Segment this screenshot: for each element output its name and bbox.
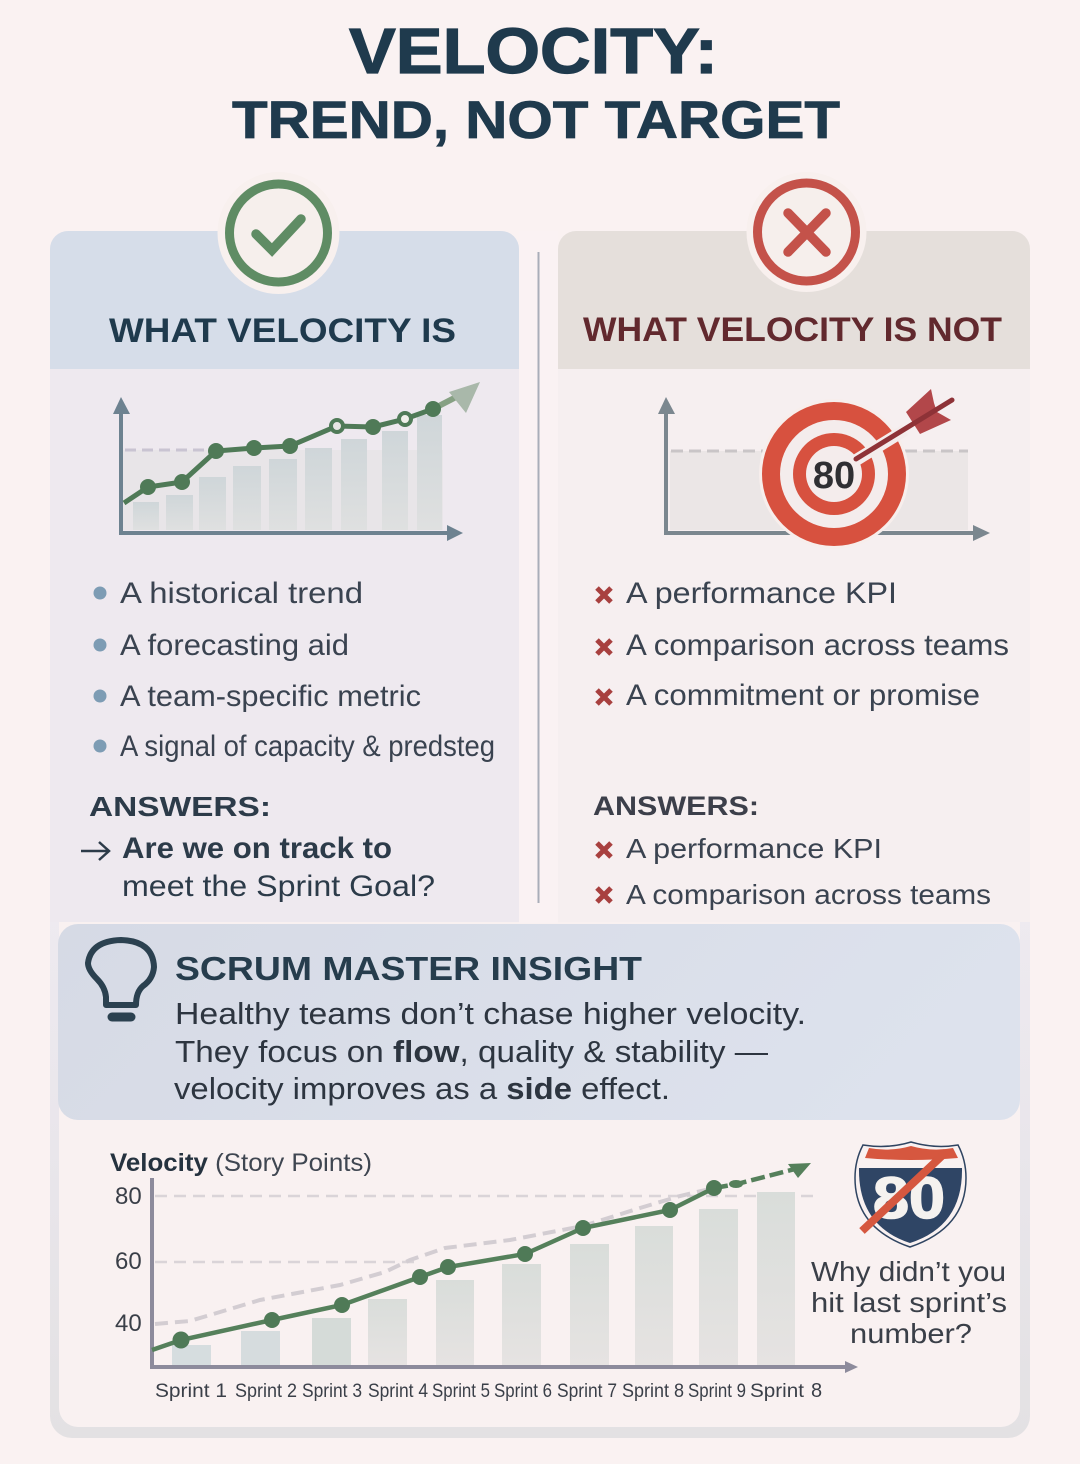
divider	[538, 252, 540, 903]
list: what velocity is: A historical trend	[120, 577, 363, 610]
x axis labels: 8	[811, 1380, 822, 1402]
list: what velocity is: A forecasting aid	[120, 629, 349, 662]
y axis labels: 60	[115, 1248, 142, 1275]
list: what velocity is not: A performance KPI	[626, 577, 897, 610]
dashed trend line	[155, 1188, 714, 1324]
panel: what velocity is not	[558, 172, 1030, 922]
heading: what velocity is: WHAT VELOCITY IS	[109, 312, 456, 350]
y axis labels	[115, 1183, 142, 1337]
answers: what velocity is: meet the Sprint Goal?	[122, 870, 435, 903]
answers: what velocity is: ANSWERS:	[89, 791, 271, 822]
x axis labels: Sprint 5	[432, 1381, 490, 1402]
chart: rising velocity trend	[113, 382, 480, 541]
list: what velocity is not	[597, 577, 1009, 712]
list: what velocity is not: A commitment or promise	[626, 679, 980, 712]
callout: question: hit last sprint’s	[811, 1287, 1007, 1318]
x axis labels: Sprint	[750, 1381, 805, 1402]
callout: question	[811, 1256, 1007, 1349]
answers: what velocity is	[81, 791, 435, 903]
y axis labels: 80	[115, 1183, 142, 1210]
insight text: velocity improves as a side effect.	[174, 1071, 670, 1106]
list: what velocity is: A signal of capacity & predsteg	[120, 730, 495, 763]
panel: velocity chart	[50, 900, 1030, 1438]
icon: lightbulb	[88, 940, 154, 1017]
answers: what velocity is: Are we on track to	[122, 832, 392, 865]
gridlines	[155, 1196, 815, 1262]
x axis labels: Sprint 8	[622, 1381, 684, 1402]
chart: target on velocity	[658, 389, 990, 549]
x axis labels: Sprint 6	[494, 1381, 552, 1402]
chart heading: Velocity (Story Points)	[110, 1149, 372, 1177]
icon: check mark	[218, 172, 340, 294]
panel: what velocity is	[50, 172, 519, 922]
y axis labels: 40	[115, 1310, 142, 1337]
icon: crossed-out highway shield	[855, 1142, 966, 1247]
icon: crossed-out highway shield: 80	[873, 1166, 945, 1231]
list: what velocity is	[94, 577, 495, 763]
title	[232, 15, 840, 150]
insight text	[174, 996, 806, 1106]
x axis labels: Sprint 3	[302, 1381, 362, 1402]
icon: cross mark	[746, 172, 866, 292]
title: VELOCITY:	[349, 15, 718, 87]
velocity line	[152, 1163, 811, 1350]
axes	[152, 1178, 858, 1373]
insight text: Healthy teams don’t chase higher velocity.	[175, 996, 806, 1031]
icon: target: 80	[813, 455, 855, 497]
gap between panels	[519, 231, 558, 923]
x axis labels	[155, 1380, 822, 1402]
answers: what velocity is not: ANSWERS:	[593, 791, 759, 821]
heading: what velocity is not: WHAT VELOCITY IS NOT	[583, 311, 1002, 349]
answers: what velocity is not: A comparison across teams	[626, 879, 991, 910]
x axis labels: Sprint 7	[557, 1381, 617, 1402]
list: what velocity is: A team-specific metric	[120, 680, 421, 713]
icon: target	[759, 389, 952, 549]
list: what velocity is not: A comparison across teams	[626, 629, 1009, 662]
answers: what velocity is not: A performance KPI	[626, 833, 882, 864]
x axis labels: Sprint 4	[368, 1381, 428, 1402]
heading: scrum master insight: SCRUM MASTER INSIGHT	[175, 950, 642, 987]
x axis labels: Sprint 1	[155, 1381, 227, 1402]
title: TREND, NOT TARGET	[232, 91, 840, 150]
callout: question: number?	[850, 1318, 972, 1349]
panel: scrum master insight	[58, 924, 1020, 1120]
callout: question: Why didn’t you	[811, 1256, 1006, 1287]
x axis labels: Sprint 2	[235, 1381, 297, 1402]
bars	[172, 1192, 795, 1365]
answers: what velocity is not	[593, 791, 991, 910]
x axis labels: Sprint 9	[688, 1381, 746, 1402]
insight text: They focus on flow, quality & stability —	[175, 1034, 768, 1069]
